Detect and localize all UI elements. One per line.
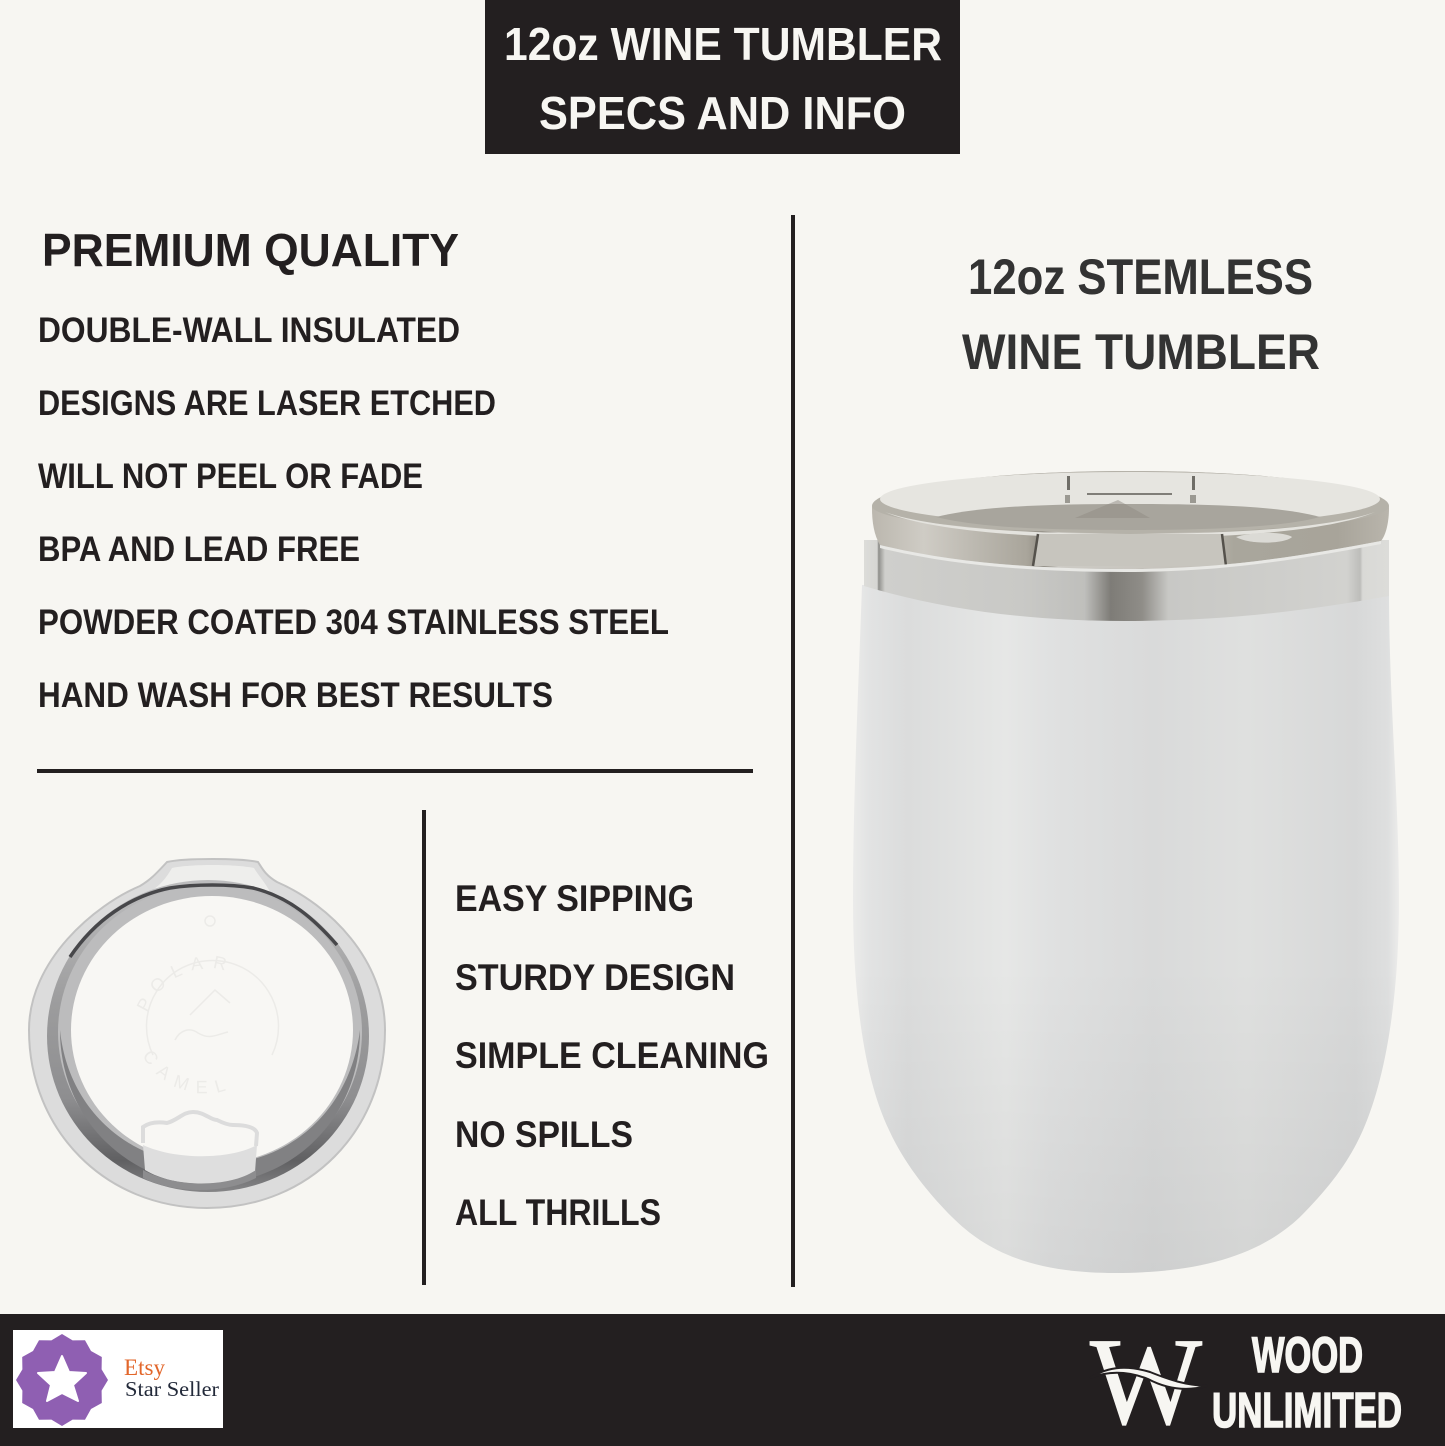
feature list: premium quality	[38, 311, 669, 715]
easy sipping list: ALL THRILLS	[455, 1192, 661, 1233]
title banner: 12oz WINE TUMBLER	[504, 18, 942, 70]
etsy star seller badge: Star Seller	[125, 1377, 219, 1401]
easy sipping list	[455, 878, 769, 1233]
tumbler lid tabs	[1065, 476, 1196, 503]
feature list: premium quality: HAND WASH FOR BEST RESULTS	[38, 676, 553, 715]
lid embossed logo	[137, 916, 279, 1093]
lid inner bevel	[47, 880, 369, 1192]
lid dark highlight arc	[70, 885, 337, 957]
lid photo	[28, 858, 386, 1209]
tumbler lid	[872, 471, 1389, 569]
heading: premium quality: PREMIUM QUALITY	[42, 224, 459, 276]
title banner: SPECS AND INFO	[539, 87, 906, 139]
etsy star seller badge	[13, 1330, 223, 1428]
etsy star seller badge: Etsy	[124, 1355, 166, 1380]
product title: WINE TUMBLER	[962, 324, 1320, 380]
feature list: premium quality: WILL NOT PEEL OR FADE	[38, 457, 423, 496]
feature list: premium quality: BPA AND LEAD FREE	[38, 530, 360, 569]
footer bar	[0, 1313, 1445, 1446]
lid sip notch	[143, 1112, 257, 1190]
icon: purple seal with star	[16, 1334, 108, 1426]
tumbler photo	[853, 471, 1399, 1273]
product title: 12oz STEMLESS	[968, 249, 1313, 305]
easy sipping list: STURDY DESIGN	[455, 957, 735, 998]
easy sipping list: NO SPILLS	[455, 1114, 633, 1155]
feature list: premium quality: POWDER COATED 304 STAINLESS STEEL	[38, 603, 669, 642]
wood unlimited wordmark: WOOD	[1252, 1327, 1363, 1383]
feature list: premium quality: DESIGNS ARE LASER ETCHED	[38, 384, 496, 423]
lid clear centre	[71, 896, 353, 1164]
lid embossed logo: CAMEL	[144, 1052, 226, 1093]
wood unlimited logo mark: W	[1090, 1313, 1202, 1446]
lid outer ring with tab	[29, 859, 385, 1208]
tumbler lid sip tab	[1034, 534, 1226, 566]
easy sipping list: SIMPLE CLEANING	[455, 1035, 769, 1076]
wood unlimited wordmark	[1212, 1327, 1402, 1438]
product title	[962, 249, 1320, 380]
feature list: premium quality: DOUBLE-WALL INSULATED	[38, 311, 460, 350]
title banner	[485, 0, 960, 154]
tumbler steel band	[864, 540, 1389, 621]
lid embossed logo: POLAR	[137, 956, 226, 1012]
easy sipping list: EASY SIPPING	[455, 878, 694, 919]
tumbler body	[853, 585, 1399, 1273]
